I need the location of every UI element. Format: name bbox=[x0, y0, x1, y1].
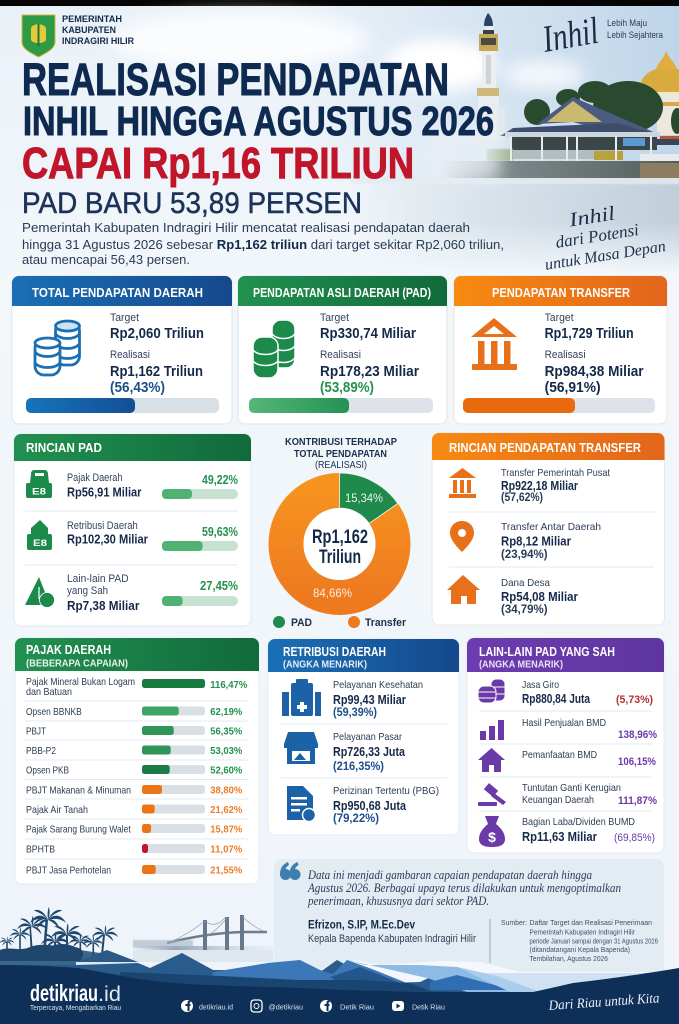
intro paragraph: Pemerintah Kabupaten Indragiri Hilir mencatat realisasi pendapatan daerah bbox=[22, 221, 470, 235]
mountains bbox=[0, 953, 490, 999]
chart legend: PAD bbox=[291, 617, 312, 629]
bar chart: tax realisation: 21,55% bbox=[210, 864, 243, 876]
header scenery bbox=[110, 6, 679, 272]
chart: contribution donut: TOTAL PENDAPATAN bbox=[294, 449, 387, 460]
Inhil tagline: Lebih Maju bbox=[607, 18, 647, 29]
row: jasa giro: Rp880,84 Juta bbox=[522, 692, 591, 706]
row: pajak daerah: Rp56,91 Miliar bbox=[67, 486, 142, 500]
chart: contribution donut: 84,66% bbox=[313, 586, 352, 600]
icon: coin stacks blue bbox=[35, 321, 80, 375]
panel: total pendapatan daerah: Target bbox=[110, 312, 139, 324]
panel: pendapatan asli daerah: Realisasi bbox=[320, 349, 361, 361]
row: retribusi daerah: Rp102,30 Miliar bbox=[67, 532, 148, 546]
bar chart: tax realisation: Opsen PKB bbox=[26, 765, 69, 777]
Inhil tagline bbox=[539, 10, 664, 61]
chart: contribution donut: Rp1,162 bbox=[312, 527, 368, 548]
chart: contribution donut: (REALISASI) bbox=[315, 460, 367, 471]
Inhil tagline: Inhil bbox=[539, 10, 602, 61]
government name: KABUPATEN bbox=[62, 25, 116, 35]
bridge bbox=[133, 915, 273, 950]
brand: detikriau bbox=[30, 980, 98, 1006]
row: transfer antar daerah: Rp8,12 Miliar bbox=[501, 534, 571, 548]
bar chart: tax realisation: Pajak Sarang Burung Walet bbox=[26, 824, 131, 836]
row: transfer pusat: Transfer Pemerintah Pusat bbox=[501, 467, 610, 479]
bar chart: tax realisation: 62,19% bbox=[210, 706, 243, 718]
bar chart: tax realisation: 52,60% bbox=[210, 765, 243, 777]
row: jasa giro: Jasa Giro bbox=[522, 679, 559, 691]
panel: pendapatan asli daerah: PENDAPATAN ASLI DAERAH (PAD) bbox=[253, 286, 431, 300]
title: PAD BARU 53,89 PERSEN bbox=[22, 187, 362, 220]
row: dana desa: (34,79%) bbox=[501, 604, 548, 616]
panel: rincian PAD bbox=[14, 434, 251, 626]
row: transfer pusat: Rp922,18 Miliar bbox=[501, 479, 578, 493]
panel: quote: Efrizon, S.IP, M.Ec.Dev bbox=[308, 918, 415, 932]
panel: pajak daerah: (BEBERAPA CAPAIAN) bbox=[26, 658, 128, 670]
panel: total pendapatan daerah: TOTAL PENDAPATAN DAERAH bbox=[32, 286, 203, 300]
row: pelayanan pasar: Rp726,33 Juta bbox=[333, 745, 406, 759]
row: lain-lain PAD bbox=[25, 573, 238, 613]
panel: pendapatan asli daerah: Target bbox=[320, 312, 349, 324]
title bbox=[22, 54, 494, 220]
top black bar bbox=[0, 0, 679, 6]
row: hasil penjualan BMD bbox=[480, 717, 657, 741]
chart: contribution donut: KONTRIBUSI TERHADAP bbox=[285, 437, 397, 448]
row: retribusi daerah bbox=[27, 520, 238, 551]
bar chart: tax realisation: PBJT bbox=[26, 726, 46, 738]
row: bagian laba: $ bbox=[488, 829, 496, 845]
bar chart: tax realisation: 38,80% bbox=[210, 784, 243, 796]
row: perizinan: (79,22%) bbox=[333, 811, 379, 825]
row: transfer antar daerah: Transfer Antar Daerah bbox=[501, 521, 601, 533]
row: retribusi daerah: E8 bbox=[33, 538, 47, 548]
row: pajak daerah: E8 bbox=[32, 486, 46, 496]
row: lain-lain PAD: yang Sah bbox=[67, 585, 108, 597]
trees bbox=[524, 81, 679, 134]
bar chart: tax realisation: Pajak Air Tanah bbox=[26, 804, 88, 816]
row: transfer pusat: (57,62%) bbox=[501, 492, 543, 504]
slogan script: untuk Masa Depan bbox=[544, 238, 667, 274]
social links: Detik Riau bbox=[412, 1002, 445, 1012]
row: dana desa bbox=[447, 575, 578, 616]
panel: total pendapatan daerah bbox=[12, 276, 232, 424]
row: pelayanan pasar bbox=[284, 731, 406, 773]
white wave under quote panel bbox=[270, 960, 679, 992]
panel: quote bbox=[274, 859, 664, 984]
panel: quote: Data ini menjadi gambaran capaian pendapatan daerah hingga bbox=[307, 867, 592, 882]
row: pelayanan pasar: (216,35%) bbox=[333, 759, 384, 773]
panel: total pendapatan daerah: (56,43%) bbox=[110, 380, 165, 396]
row: lain-lain PAD: Rp7,38 Miliar bbox=[67, 599, 140, 613]
row: tuntutan ganti kerugian bbox=[478, 782, 657, 807]
lodge roof bbox=[76, 950, 138, 962]
panel: pajak daerah bbox=[15, 638, 259, 884]
bar chart: tax realisation: 56,35% bbox=[210, 726, 243, 738]
brand: .id bbox=[98, 983, 121, 1006]
panel: pendapatan asli daerah bbox=[238, 276, 447, 424]
row: bagian laba bbox=[479, 816, 655, 847]
panel: quote: penerimaan, khususnya dari sektor PAD. bbox=[307, 893, 489, 908]
bar chart: tax realisation: BPHTB bbox=[26, 844, 55, 856]
row: pelayanan pasar: Pelayanan Pasar bbox=[333, 731, 402, 743]
row: transfer pusat bbox=[449, 467, 610, 504]
intro paragraph: hingga 31 Agustus 2026 sebesar Rp1,162 triliun dari target sekitar Rp2,060 triliun, bbox=[22, 238, 504, 252]
row: retribusi daerah: Retribusi Daerah bbox=[67, 520, 138, 532]
panel: pendapatan transfer: Realisasi bbox=[545, 349, 586, 361]
chart: contribution donut: Triliun bbox=[319, 547, 361, 568]
bar chart: tax realisation: PBJT Jasa Perhotelan bbox=[26, 864, 111, 876]
brand: Terpercaya, Mengabarkan Riau bbox=[30, 1003, 121, 1012]
row: jasa giro: (5,73%) bbox=[616, 694, 653, 706]
panel: pajak daerah: PAJAK DAERAH bbox=[26, 643, 111, 657]
mosque dome bbox=[639, 51, 679, 142]
row: tuntutan ganti kerugian: 111,87% bbox=[618, 795, 657, 807]
row: bagian laba: Bagian Laba/Dividen BUMD bbox=[522, 816, 635, 828]
panel: pendapatan transfer bbox=[454, 276, 667, 424]
row: lain-lain PAD: Lain-lain PAD bbox=[67, 573, 129, 585]
row: dana desa: Dana Desa bbox=[501, 577, 550, 589]
panel: quote: Kepala Bapenda Kabupaten Indragiri Hilir bbox=[308, 933, 476, 945]
social links bbox=[181, 1000, 445, 1012]
row: hasil penjualan BMD: 138,96% bbox=[618, 729, 657, 741]
logo: Indragiri Hilir shield bbox=[22, 15, 55, 57]
panel: pendapatan transfer: PENDAPATAN TRANSFER bbox=[492, 286, 630, 300]
footer band bbox=[0, 965, 679, 1024]
panel: retribusi daerah bbox=[268, 639, 459, 835]
bar chart: tax realisation: PBB-P2 bbox=[26, 745, 56, 757]
chart: contribution donut: 15,34% bbox=[345, 491, 383, 505]
row: transfer antar daerah bbox=[450, 521, 601, 561]
social links: detikriau.id bbox=[199, 1002, 233, 1012]
panel: pendapatan transfer: Rp984,38 Miliar bbox=[545, 364, 644, 380]
row: retribusi daerah: 59,63% bbox=[202, 525, 238, 539]
panel: lain-lain PAD yang sah: (ANGKA MENARIK) bbox=[479, 660, 563, 670]
government name: PEMERINTAH bbox=[62, 14, 122, 24]
row: pelayanan kesehatan: (59,39%) bbox=[333, 705, 377, 719]
title: REALISASI PENDAPATAN bbox=[22, 54, 449, 105]
chart legend bbox=[273, 616, 407, 629]
row: hasil penjualan BMD: Hasil Penjualan BMD bbox=[522, 717, 606, 729]
social links: @detikriau bbox=[268, 1002, 303, 1012]
source note: (ditandatangani Kepala Bapenda) bbox=[530, 945, 630, 954]
panel: pendapatan transfer: (56,91%) bbox=[545, 380, 601, 396]
row: pemanfaatan BMD: 106,15% bbox=[618, 756, 656, 768]
panel: rincian pendapatan transfer bbox=[432, 433, 664, 625]
row: pelayanan kesehatan: Pelayanan Kesehatan bbox=[333, 679, 423, 691]
shore and palms bbox=[0, 907, 140, 975]
chart: contribution donut bbox=[273, 437, 407, 629]
bar chart: tax realisation: 21,62% bbox=[210, 804, 243, 816]
panel: quote: Agustus 2026. Berbagai upaya terus dilakukan untuk mengoptimalkan bbox=[307, 880, 621, 895]
row: pemanfaatan BMD bbox=[478, 748, 656, 772]
bar chart: tax realisation: 11,07% bbox=[210, 844, 243, 856]
row: perizinan: Perizinan Tertentu (PBG) bbox=[333, 785, 439, 797]
bar chart: tax realisation: PBJT Makanan & Minuman bbox=[26, 784, 131, 796]
panel: retribusi daerah: RETRIBUSI DAERAH bbox=[283, 645, 386, 659]
source note: Pemerintah Kabupaten Indragiri Hilir bbox=[530, 928, 635, 936]
row: perizinan bbox=[287, 785, 439, 825]
government name: INDRAGIRI HILIR bbox=[62, 36, 134, 46]
row: lain-lain PAD: 27,45% bbox=[200, 579, 238, 593]
social links: Detik Riau bbox=[340, 1002, 374, 1012]
row: transfer antar daerah: (23,94%) bbox=[501, 549, 548, 561]
slogan script: dari Potensi bbox=[554, 220, 640, 252]
panel: lain-lain PAD yang sah bbox=[467, 638, 664, 853]
row: pajak daerah: 49,22% bbox=[202, 473, 238, 487]
panel: total pendapatan daerah: Rp1,162 Triliun bbox=[110, 364, 203, 380]
footer slogan: Dari Riau untuk Kita bbox=[547, 991, 660, 1014]
Inhil tagline: Lebih Sejahtera bbox=[607, 30, 664, 41]
panel: pendapatan transfer: Target bbox=[545, 312, 574, 324]
row: pemanfaatan BMD: Pemanfaatan BMD bbox=[522, 749, 597, 761]
bar chart: tax realisation: 53,03% bbox=[210, 745, 243, 757]
source note: Sumber: bbox=[501, 918, 527, 927]
bar chart: tax realisation bbox=[26, 676, 248, 876]
title: CAPAI Rp1,16 TRILIUN bbox=[22, 139, 414, 188]
tower bbox=[477, 13, 505, 140]
bar chart: tax realisation: 116,47% bbox=[210, 679, 248, 691]
panel: pendapatan asli daerah: Rp178,23 Miliar bbox=[320, 364, 419, 380]
row: tuntutan ganti kerugian: Keuangan Daerah bbox=[522, 794, 594, 806]
row: perizinan: Rp950,68 Juta bbox=[333, 799, 407, 813]
panel: lain-lain PAD yang sah: LAIN-LAIN PAD YANG SAH bbox=[479, 645, 615, 659]
row: bagian laba: (69,85%) bbox=[614, 832, 655, 844]
icon: coin stacks green bbox=[253, 320, 295, 378]
panel: rincian PAD: RINCIAN PAD bbox=[26, 441, 102, 455]
water bbox=[133, 950, 273, 962]
bar chart: tax realisation: dan Batuan bbox=[26, 686, 72, 698]
row: bagian laba: Rp11,63 Miliar bbox=[522, 830, 597, 844]
title: INHIL HINGGA AGUSTUS 2026 bbox=[23, 98, 494, 144]
row: tuntutan ganti kerugian: Tuntutan Ganti Kerugian bbox=[522, 782, 621, 794]
slogan script: Inhil bbox=[566, 202, 617, 232]
wooden house bbox=[440, 97, 679, 178]
panel: total pendapatan daerah: Rp2,060 Triliun bbox=[110, 326, 204, 342]
row: pajak daerah: Pajak Daerah bbox=[67, 472, 122, 484]
source note: Tembilahan, Agustus 2026 bbox=[530, 954, 608, 963]
government name bbox=[62, 14, 134, 46]
row: pajak daerah bbox=[26, 470, 238, 500]
intro paragraph bbox=[22, 221, 504, 267]
panel: pendapatan asli daerah: Rp330,74 Miliar bbox=[320, 326, 416, 342]
row: jasa giro bbox=[478, 679, 653, 706]
intro paragraph: atau mencapai 56,43 persen. bbox=[22, 253, 190, 267]
panel: total pendapatan daerah: Realisasi bbox=[110, 349, 150, 361]
icon: bank building bbox=[471, 318, 517, 370]
bar chart: tax realisation: Pajak Mineral Bukan Logam bbox=[26, 676, 135, 688]
bar chart: tax realisation: Opsen BBNKB bbox=[26, 706, 82, 718]
row: dana desa: Rp54,08 Miliar bbox=[501, 590, 578, 604]
source note bbox=[501, 918, 658, 963]
panel: rincian pendapatan transfer: RINCIAN PENDAPATAN TRANSFER bbox=[449, 441, 641, 455]
chart legend: Transfer bbox=[365, 617, 407, 629]
slogan script bbox=[537, 196, 667, 274]
bar chart: tax realisation: 15,87% bbox=[210, 824, 243, 836]
row: pelayanan kesehatan: Rp99,43 Miliar bbox=[333, 693, 406, 707]
panel: pendapatan asli daerah: (53,89%) bbox=[320, 380, 374, 396]
row: pelayanan kesehatan bbox=[282, 679, 423, 719]
panel: retribusi daerah: (ANGKA MENARIK) bbox=[283, 660, 367, 670]
landscape: palms, bridge, mountains bbox=[0, 907, 679, 999]
panel: pendapatan transfer: Rp1,729 Triliun bbox=[545, 326, 634, 342]
source note: Daftar Target dan Realisasi Penerimaan bbox=[530, 918, 652, 927]
icon: quote mark bbox=[280, 862, 300, 880]
